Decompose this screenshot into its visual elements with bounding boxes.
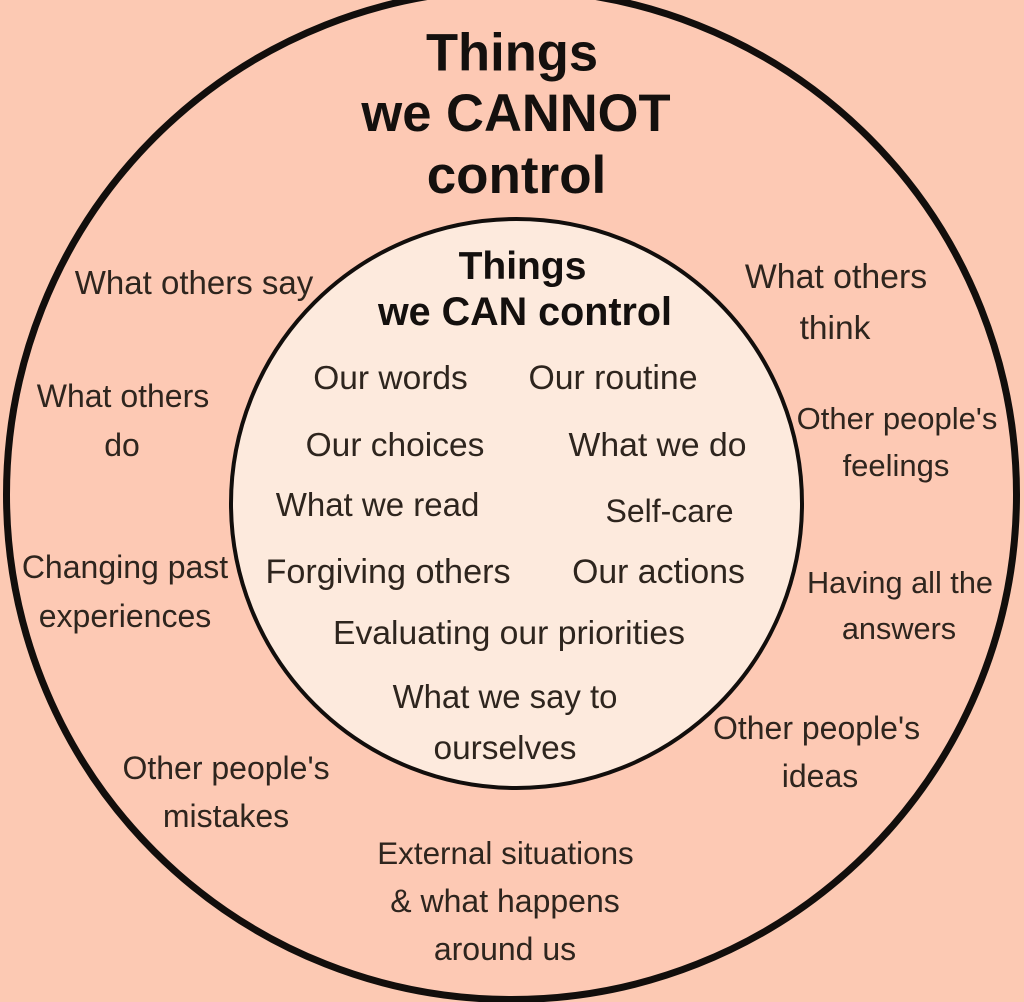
list: things we cannot control: External situations (377, 836, 634, 871)
list: things we can control: What we read (276, 486, 479, 523)
list: things we cannot control: ideas (782, 758, 858, 794)
list: things we cannot control: & what happens (390, 883, 620, 919)
list: things we can control: Self-care (605, 493, 734, 529)
heading: things we can control: Things (459, 245, 586, 288)
list: things we cannot control: feelings (843, 448, 949, 483)
list: things we can control: ourselves (434, 730, 576, 767)
list: things we can control: What we say to (393, 678, 617, 715)
list: things we cannot control: Having all the (807, 565, 993, 600)
list: things we can control: Our actions (572, 553, 745, 591)
heading: things we cannot control: Things (426, 24, 598, 82)
list: things we cannot control: Other people's (122, 750, 330, 786)
list: things we cannot control: What others (745, 258, 927, 296)
heading: things we can control: we CAN control (377, 290, 672, 334)
list: things we cannot control: mistakes (163, 798, 289, 834)
list: things we cannot control (22, 258, 997, 967)
list: things we can control: Evaluating our priorities (333, 614, 685, 652)
list: things we cannot control: Other people's (713, 710, 920, 746)
list: things we can control: What we do (569, 426, 746, 464)
list: things we can control: Our routine (528, 359, 698, 397)
inner circle (231, 219, 802, 788)
list: things we cannot control: What others say (75, 264, 314, 301)
heading: things we can control (377, 245, 672, 334)
list: things we cannot control: experiences (39, 598, 211, 634)
heading: things we cannot control: we CANNOT (360, 84, 671, 143)
list: things we can control: Our choices (306, 427, 484, 464)
list: things we can control: Our words (313, 360, 468, 397)
list: things we cannot control: Other people's (797, 401, 997, 436)
list: things we can control (265, 359, 746, 767)
list: things we cannot control: What others (37, 378, 209, 414)
list: things we cannot control: answers (842, 611, 956, 646)
list: things we cannot control: do (104, 427, 140, 463)
heading: things we cannot control: control (427, 146, 606, 205)
list: things we can control: Forgiving others (265, 553, 511, 591)
list: things we cannot control: around us (434, 931, 576, 967)
heading: things we cannot control (360, 24, 671, 205)
list: things we cannot control: think (800, 310, 871, 347)
list: things we cannot control: Changing past (22, 549, 228, 585)
